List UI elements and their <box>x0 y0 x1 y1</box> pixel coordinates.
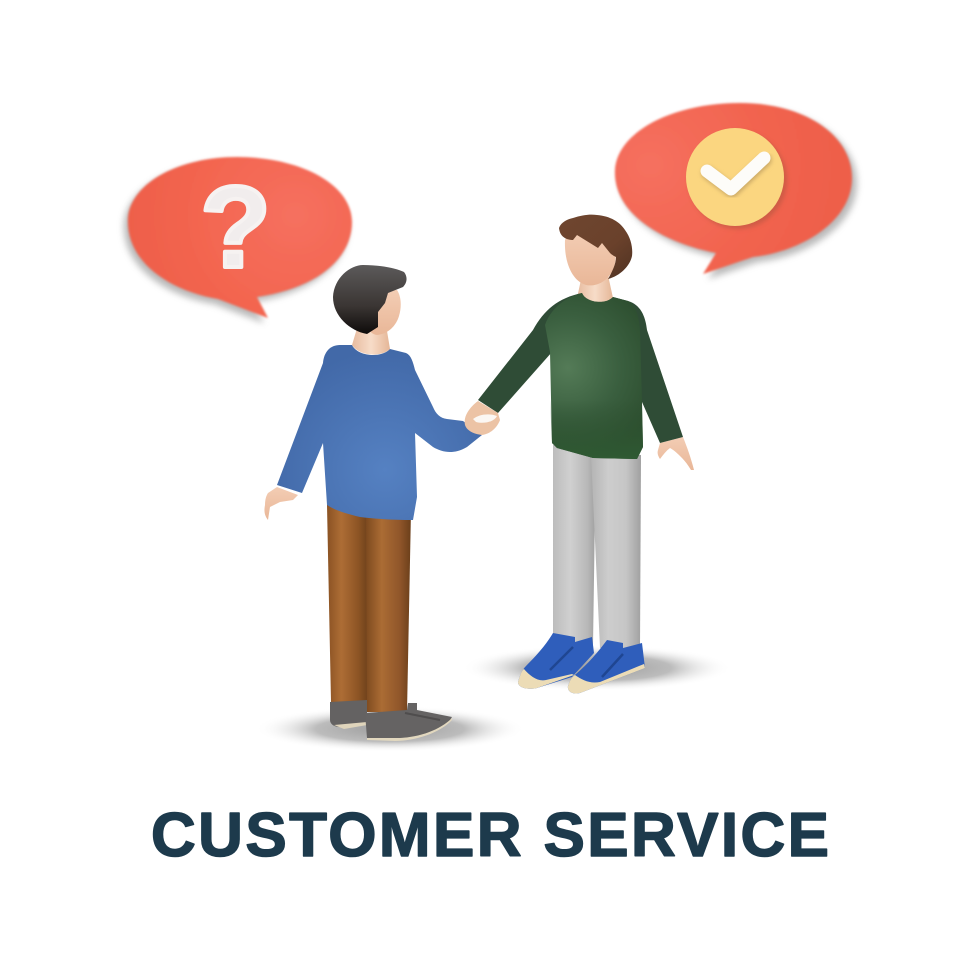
neck <box>577 275 613 303</box>
right hand <box>658 437 694 470</box>
head <box>365 290 401 335</box>
hair <box>333 265 407 334</box>
floor shadow: right person <box>462 645 732 691</box>
person: agent in blue <box>264 265 482 741</box>
title: CUSTOMER SERVICE <box>151 801 829 870</box>
floor shadow: left person <box>255 706 525 752</box>
hair <box>559 215 632 279</box>
shoes <box>330 700 452 741</box>
sweater <box>478 293 683 459</box>
trousers <box>327 505 411 712</box>
icon: clasped hands <box>465 401 500 435</box>
speech bubble: question <box>124 157 352 323</box>
icon: question mark: ? <box>200 162 271 292</box>
shoes <box>518 633 645 694</box>
icon: check badge <box>686 128 787 229</box>
trousers <box>553 445 641 648</box>
sweater <box>277 345 482 520</box>
left hand <box>264 487 298 520</box>
head <box>565 230 616 285</box>
speech bubble: check <box>615 103 857 279</box>
person: customer in green <box>478 215 694 694</box>
illustration <box>120 101 860 748</box>
neck <box>352 325 390 355</box>
